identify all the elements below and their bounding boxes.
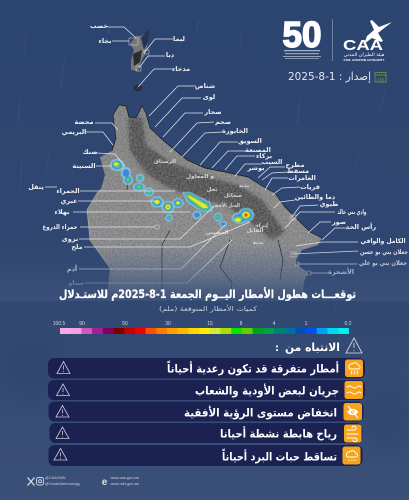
warning heading: : <box>275 343 279 354</box>
icon: web: e <box>102 477 108 488</box>
leader labels: western interior: ضنك <box>82 148 98 156</box>
map place names: بدبد <box>239 183 249 189</box>
leader labels: Batinah coast: السويق <box>238 137 262 145</box>
logo: CAA: CIVIL AVIATION AUTHORITY <box>344 58 385 62</box>
map place names: نخل <box>207 187 217 193</box>
map place names: سمائل <box>224 193 242 199</box>
leader labels: Musandam: دبا <box>166 51 175 59</box>
rainfall legend: 1 <box>305 321 308 327</box>
leader labels: Musandam: بخاء <box>99 37 111 45</box>
leader labels: Musandam <box>90 22 190 87</box>
logo: CAA <box>343 20 392 62</box>
leader labels: Batinah coast: صحار <box>203 108 222 116</box>
leader labels: western interior: أدم <box>67 264 77 273</box>
rain mid <box>113 162 251 222</box>
leader labels: Batinah coast: بوشر <box>247 164 264 172</box>
map: Oman land <box>80 100 330 300</box>
rainfall legend: 15 <box>207 321 213 327</box>
leader labels: eastern coast: مطرح <box>285 161 305 169</box>
map place names: بدية <box>253 240 263 246</box>
rain core <box>114 162 250 222</box>
title: توقعـــات هطول الأمطار اليــوم الجمعة 1-8-2025م للاستـدلال <box>59 287 356 302</box>
leader labels: Batinah coast: السيب <box>262 158 282 166</box>
leader labels: eastern coast: طيوي <box>320 200 338 208</box>
leader labels: Batinah coast <box>149 82 282 176</box>
leader labels: western interior: ينقل <box>28 183 44 191</box>
leader labels: Batinah coast: لوى <box>203 93 215 101</box>
map place names: إبراء <box>256 223 268 229</box>
rainfall legend: 30 <box>165 321 171 327</box>
leader labels: eastern coast: وادي بني خالد <box>338 208 366 216</box>
leader labels: eastern coast: رأس الحد <box>346 222 376 231</box>
leader labels: eastern coast <box>258 161 408 276</box>
social handles: @OmanMeteorology <box>45 482 80 486</box>
warning row: downdraft winds <box>50 423 362 443</box>
map place names: القابل <box>247 228 264 234</box>
leader labels: western interior: عبري <box>60 197 78 205</box>
warning row: hail: تساقط حبات البرد أحياناً <box>222 448 337 464</box>
rain halo <box>110 159 254 227</box>
websites: www.met.gov.om <box>110 482 139 486</box>
rainfall legend: 100.5 <box>53 321 65 327</box>
leader labels: eastern coast: الأشخرة <box>328 267 354 276</box>
map place names <box>154 159 268 246</box>
divider <box>331 19 334 61</box>
warning row: low visibility <box>48 402 364 422</box>
leader labels: western interior: سناو <box>67 279 84 287</box>
icon: warning triangle <box>346 338 362 353</box>
leader labels: eastern coast: العامرات <box>288 174 316 182</box>
leader labels: western interior: السنينة <box>72 162 96 170</box>
rain blue ring <box>112 160 252 226</box>
logo: CAA: CAA <box>343 37 383 54</box>
leader labels: eastern coast: صور <box>331 218 346 226</box>
warning heading: الانتباه من <box>285 341 340 354</box>
logo: 50 years: 50 <box>282 14 322 55</box>
rainfall legend <box>53 321 352 334</box>
leader labels: western interior: ملح <box>71 243 83 251</box>
leader labels: Musandam: ليما <box>173 35 185 43</box>
leader labels: Musandam: خصب <box>90 22 108 30</box>
map place names: الرستاق <box>154 159 176 165</box>
rainfall legend: 90 <box>79 321 85 327</box>
rainfall legend: 50 <box>122 321 128 327</box>
leader labels: Batinah coast: الخابورة <box>222 127 248 135</box>
warning row: low visibility: انخفاض مستوى الرؤية الأفقية <box>184 406 337 420</box>
map place names: و المعاول <box>186 174 215 180</box>
leader labels: western interior: حمراء الدروع <box>42 223 78 231</box>
leader labels: western interior: بهلاء <box>54 208 70 216</box>
sea streaks <box>18 20 385 310</box>
rainfall legend: 4 <box>273 321 276 327</box>
warning row: scattered rain: أمطار متفرقة قد تكون رعدية أحياناً <box>167 360 339 376</box>
leader labels: western interior: البريمي <box>62 128 86 136</box>
warning row: wadi flow: جريان لبعض الأودية والشعاب <box>195 384 339 398</box>
map: Musandam islands <box>130 27 150 91</box>
lower background mottling <box>2 340 409 450</box>
rain peak <box>167 206 248 217</box>
leader labels: Batinah coast: شناص <box>195 82 215 90</box>
leader labels: eastern coast: قريات <box>300 183 320 191</box>
leader labels: western interior <box>28 118 250 287</box>
social handles <box>28 476 80 486</box>
warning row: downdraft winds: رياح هابطة نشطة أحيانا <box>220 426 337 440</box>
warning row: scattered rain <box>48 358 365 378</box>
issue date: إصدار : 1-8-2025 <box>288 70 371 83</box>
warning heading <box>275 338 362 354</box>
leader labels: western interior: نزوى <box>62 235 78 243</box>
leader labels: Musandam: مدحاء <box>172 65 190 73</box>
leader labels: eastern coast: مسقط <box>287 167 309 175</box>
websites <box>102 476 139 488</box>
leader labels: Batinah coast: صحم <box>215 118 231 126</box>
leader labels: western interior: الحمراء <box>56 187 80 195</box>
bottom fade over map <box>0 245 409 301</box>
social handles: @CAAOMN <box>45 476 66 480</box>
leader labels: eastern coast: الكامل والوافي <box>360 237 406 245</box>
icon: X <box>28 478 34 486</box>
icon: instagram <box>36 478 44 485</box>
leader labels: Batinah coast: المصنعة <box>245 146 271 154</box>
websites: www.caa.gov.om <box>110 476 139 480</box>
leader labels: western interior: محضة <box>74 118 94 126</box>
leader labels: Batinah coast: بركاء <box>256 152 272 160</box>
map place names: الجبل الأخضر <box>211 201 240 209</box>
rain radar blobs <box>110 159 254 227</box>
map place names: المضيبي <box>205 230 229 236</box>
warning row: hail <box>48 445 362 466</box>
leader labels: eastern coast: دما والطائين <box>295 193 336 201</box>
rainfall legend: 0.2 <box>345 321 352 327</box>
logo: CAA: هيئة الطيران المدني <box>344 53 385 58</box>
icon: calendar <box>375 72 386 82</box>
subtitle: كميات الأمطار المتوقعة (ملم) <box>159 304 258 313</box>
warning row: wadi flow <box>48 380 365 400</box>
rainfall legend: 8 <box>240 321 243 327</box>
